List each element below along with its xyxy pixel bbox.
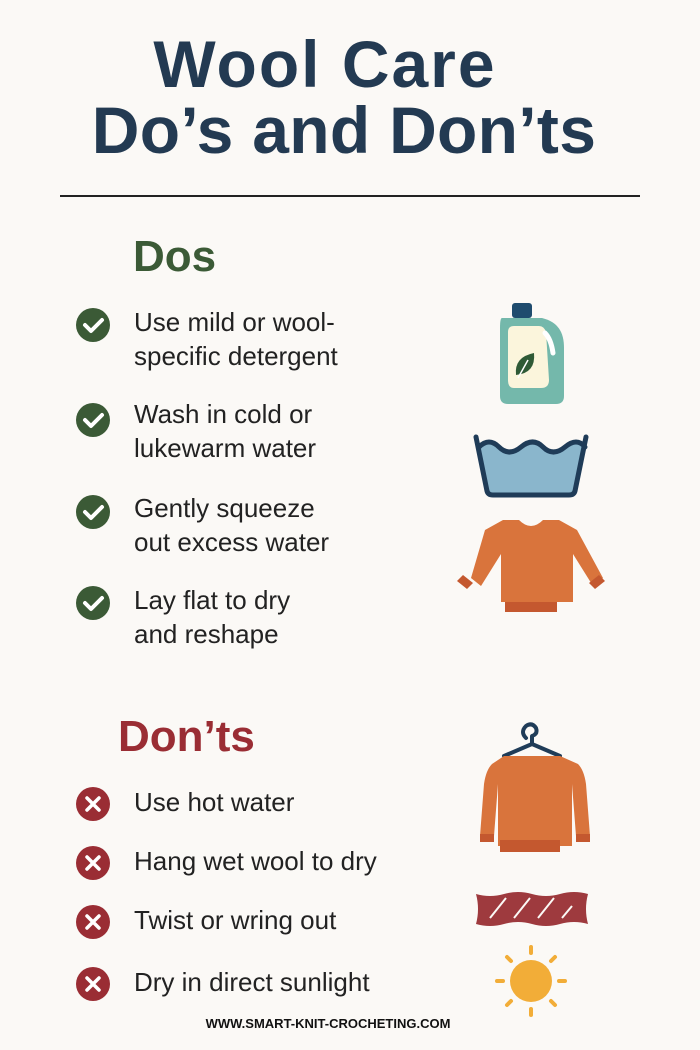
item: check 2 <box>134 399 316 463</box>
item: x 4: Dry in direct sunlight <box>134 967 370 997</box>
item: x 2: Hang wet wool to dry <box>134 846 377 876</box>
icon: sweater flat <box>457 520 605 612</box>
item: check 1: specific detergent <box>134 341 338 371</box>
icon: x 2 <box>76 846 110 880</box>
icon: twisted wool <box>476 892 588 926</box>
icon: check 3 <box>76 495 110 529</box>
icon: check 4 <box>76 586 110 620</box>
icon: sweater on hanger <box>480 722 590 852</box>
item: check 4: and reshape <box>134 619 279 649</box>
item: check 4: Lay flat to dry <box>134 585 290 615</box>
icon: check 2 <box>76 403 110 437</box>
item: check 1 <box>134 307 338 371</box>
icon: x 4 <box>76 967 110 1001</box>
heading: Don'ts: Don’ts <box>118 712 255 761</box>
icon: wash basin <box>474 434 588 498</box>
title: Wool Care <box>153 27 497 101</box>
item: check 3: out excess water <box>134 527 329 557</box>
title <box>92 27 596 167</box>
icon: check 1 <box>76 308 110 342</box>
item: check 3: Gently squeeze <box>134 493 315 523</box>
icon: detergent bottle <box>500 303 564 404</box>
item: check 1: Use mild or wool- <box>134 307 335 337</box>
item: check 2: Wash in cold or <box>134 399 312 429</box>
item: check 4 <box>134 585 290 649</box>
icon: x 3 <box>76 905 110 939</box>
title: Do’s and Don’ts <box>92 93 596 167</box>
item: check 2: lukewarm water <box>134 433 316 463</box>
icon: x 1 <box>76 787 110 821</box>
heading: Dos: Dos <box>133 232 216 281</box>
item: x 1: Use hot water <box>134 787 294 817</box>
item: check 3 <box>134 493 329 557</box>
item: x 3: Twist or wring out <box>134 905 336 935</box>
footer: WWW.SMART-KNIT-CROCHETING.COM <box>206 1016 450 1031</box>
icon: sun <box>495 945 567 1017</box>
